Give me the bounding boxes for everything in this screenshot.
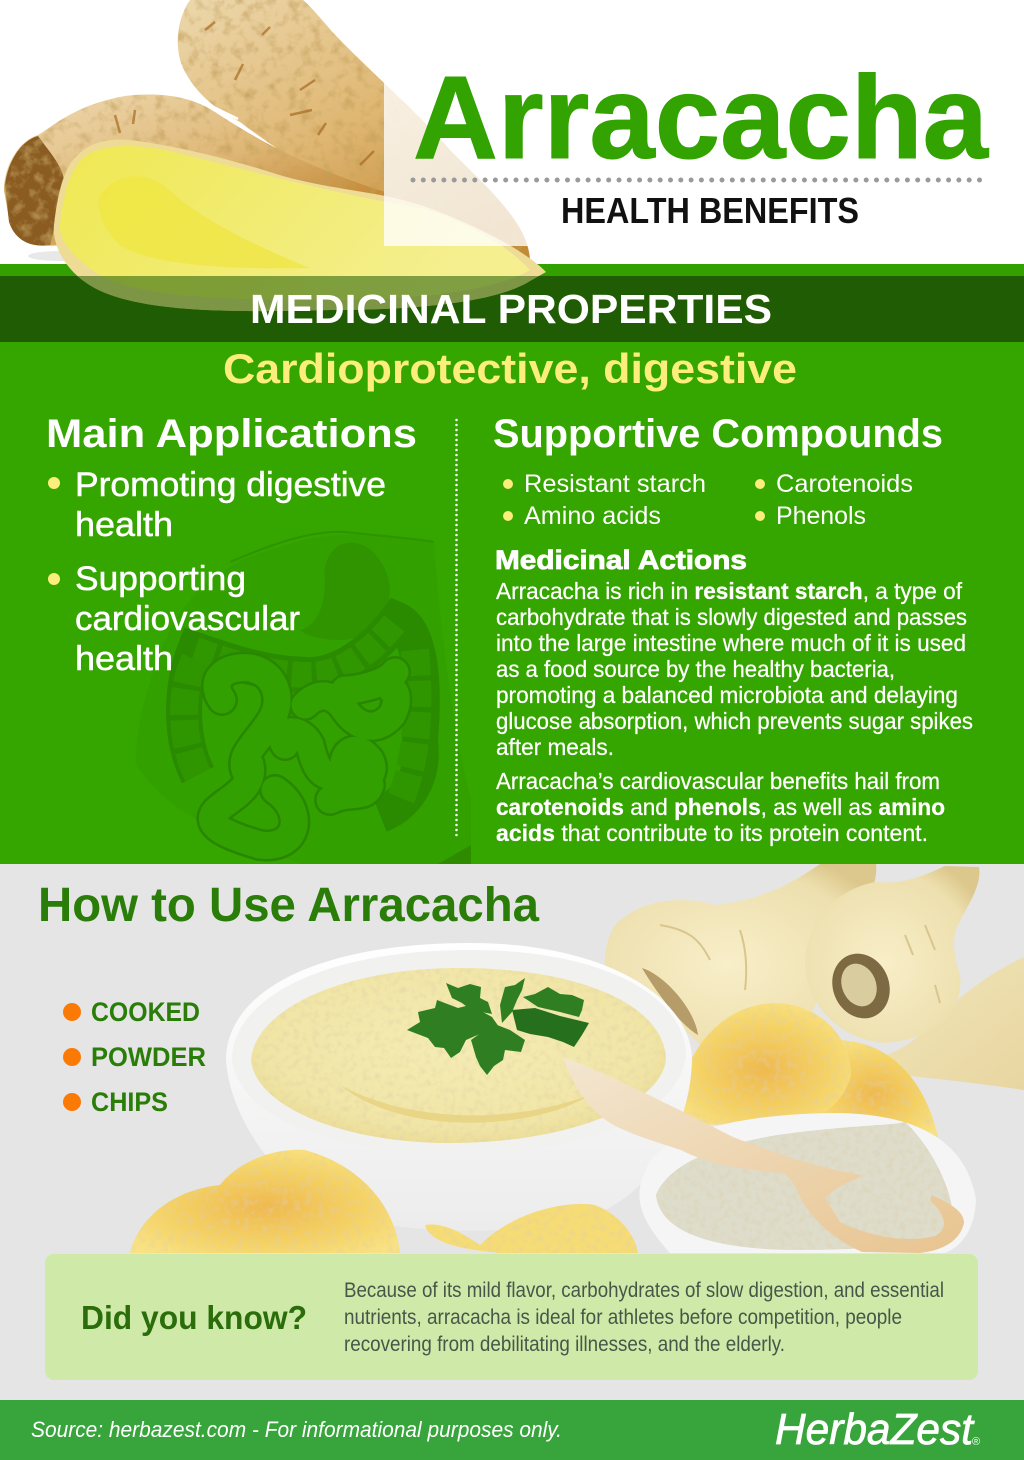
green stripe [0,264,1024,276]
text: cardiovascular paragraph [496,768,945,846]
illustration: chips in front [130,1150,638,1253]
illustration: hummus bowl [226,943,692,1231]
text: did you know [344,1279,944,1356]
panel: did you know [45,1254,978,1380]
illustration: chips behind bowl [676,1003,938,1137]
icon: parsley [407,978,589,1075]
compound list: Resistant starch [524,470,706,498]
illustration: powder bowl [639,1113,976,1253]
dotted divider [413,178,985,182]
panel: main applications [46,412,417,678]
list: forms of use: CHIPS [91,1087,168,1117]
text: did you know: recovering from debilitating illnesses, and the elderly. [344,1333,785,1356]
bullet: cardiovascular health [48,560,300,678]
list: forms of use: COOKED [91,997,200,1027]
heading: did you know: Did you know? [81,1299,307,1336]
text: resistant starch paragraph: glucose absorption, which prevents sugar spikes [496,708,973,734]
bullet: digestive health: health [75,506,173,544]
text: cardiovascular paragraph: acids that contribute to its protein content. [496,820,928,846]
illustration: digestive system [136,532,471,864]
compound list: Amino acids [524,502,661,530]
compound list: Phenols [776,502,866,530]
heading: main applications: Main Applications [46,412,417,456]
footer bar [0,1400,1024,1460]
medicinal properties band [0,276,1024,342]
text: resistant starch paragraph: into the large intestine where much of it is used [496,630,966,656]
header background [0,0,1024,264]
bullet: digestive health: Promoting digestive [75,466,386,504]
illustration: arracacha roots [4,0,546,311]
bullet: cardiovascular health: Supporting [75,560,246,598]
text: cardiovascular paragraph: carotenoids and phenols, as well as amino [496,794,945,820]
text: resistant starch paragraph: after meals. [496,734,614,760]
how to use background [0,864,1024,1400]
logo: HerbaZest: HerbaZest [775,1405,975,1454]
heading: medicinal actions: Medicinal Actions [495,545,747,575]
illustration: wooden spoon [563,1057,964,1253]
text: resistant starch paragraph: promoting a balanced microbiota and delaying [496,682,958,708]
text: did you know: nutrients, arracacha is ideal for athletes before competition, people [344,1306,902,1329]
pale overlay behind title [384,70,546,246]
illustration: whole arracacha roots [605,863,1024,1090]
text: cardiovascular paragraph: Arracacha’s cardiovascular benefits hail from [496,768,940,794]
band heading: MEDICINAL PROPERTIES [250,286,772,332]
intestine tubes [212,668,396,845]
title: Arracacha [413,52,989,184]
subtitle: HEALTH BENEFITS [561,190,859,231]
green panel background [0,342,1024,864]
logo: HerbaZest: ® [972,1436,980,1448]
list: forms of use: POWDER [91,1042,206,1072]
panel: supportive compounds [493,412,973,846]
heading: supportive compounds: Supportive Compounds [493,412,943,456]
text: resistant starch paragraph: carbohydrate that is slowly digested and passes [496,604,967,630]
text: resistant starch paragraph: as a food source by the healthy bacteria, [496,656,895,682]
text: did you know: Because of its mild flavor, carbohydrates of slow digestion, and essential [344,1279,944,1302]
compound list [503,470,913,530]
source note: Source: herbazest.com - For informational purposes only. [31,1417,562,1442]
root shade over band [78,276,538,311]
bullet: digestive health [48,466,386,544]
bullet: cardiovascular health: cardiovascular [75,600,300,638]
bullet: cardiovascular health: health [75,640,173,678]
list: forms of use [63,997,206,1117]
compound list: Carotenoids [776,470,913,498]
vertical dotted divider [455,420,458,840]
text: resistant starch paragraph: Arracacha is rich in resistant starch, a type of [496,578,963,604]
properties text: Cardioprotective, digestive [223,345,797,392]
text: resistant starch paragraph [496,578,973,760]
heading: how to use: How to Use Arracacha [38,879,539,932]
